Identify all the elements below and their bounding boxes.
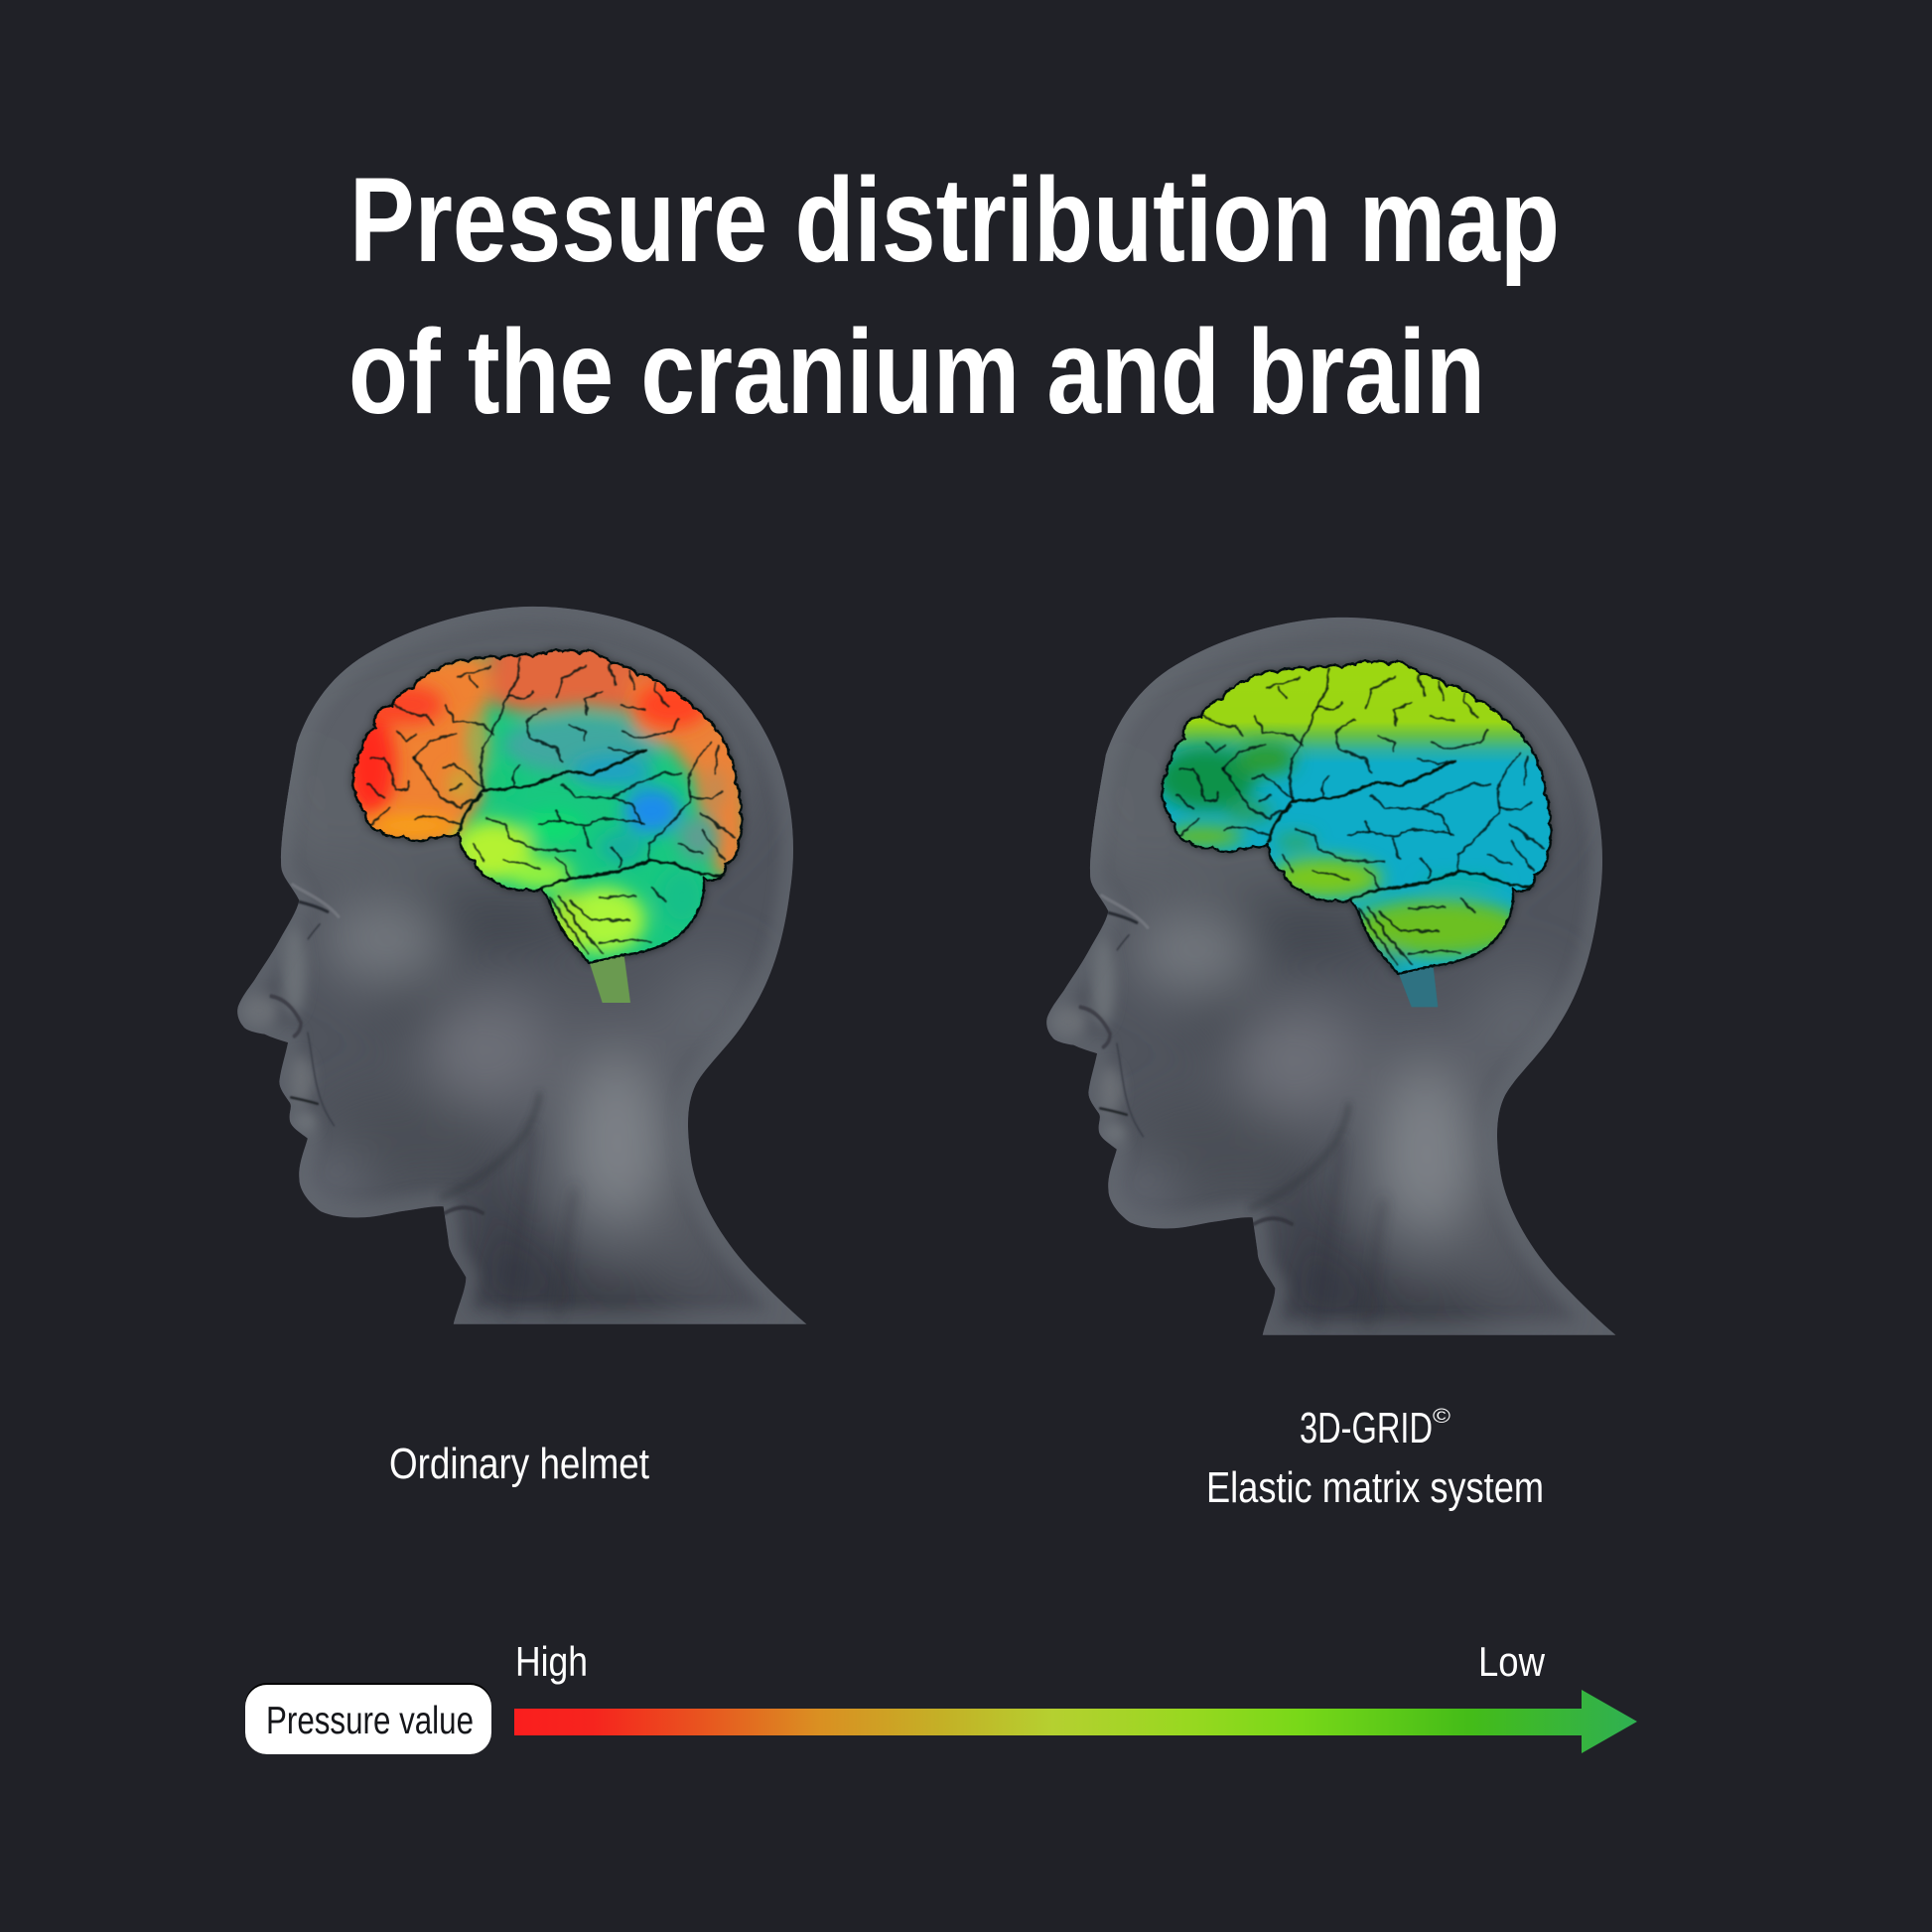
label: 3D-GRID elastic matrix system [1206,1404,1544,1512]
head silhouette: right [1033,617,1615,1352]
panel: 3D-GRID head [1033,617,1615,1352]
brain stem [1398,964,1438,1007]
brain pressure map: right [1158,656,1556,1007]
title: Pressure distribution map [349,152,1560,287]
brain outline and folds [352,650,743,963]
head silhouette: left [223,606,806,1341]
legend: high label: High [515,1638,588,1685]
label: ordinary helmet: Ordinary helmet [389,1440,649,1488]
brain pressure map: left [338,635,755,1013]
brain outline and folds [1162,661,1552,974]
panel: ordinary helmet head [223,606,806,1341]
brain stem [589,953,630,1003]
legend: gradient arrow high to low [514,1690,1637,1753]
legend: low label: Low [1478,1638,1546,1685]
title: of the cranium and brain [348,304,1485,439]
legend: pressure value pill: Pressure value [266,1700,474,1742]
label: 3D-GRID elastic matrix system: © [1433,1406,1450,1428]
legend: pressure value pill [245,1683,491,1754]
label: 3D-GRID elastic matrix system: Elastic matrix system [1206,1463,1544,1512]
label: 3D-GRID elastic matrix system: 3D-GRID [1300,1404,1433,1452]
title [348,152,1560,439]
